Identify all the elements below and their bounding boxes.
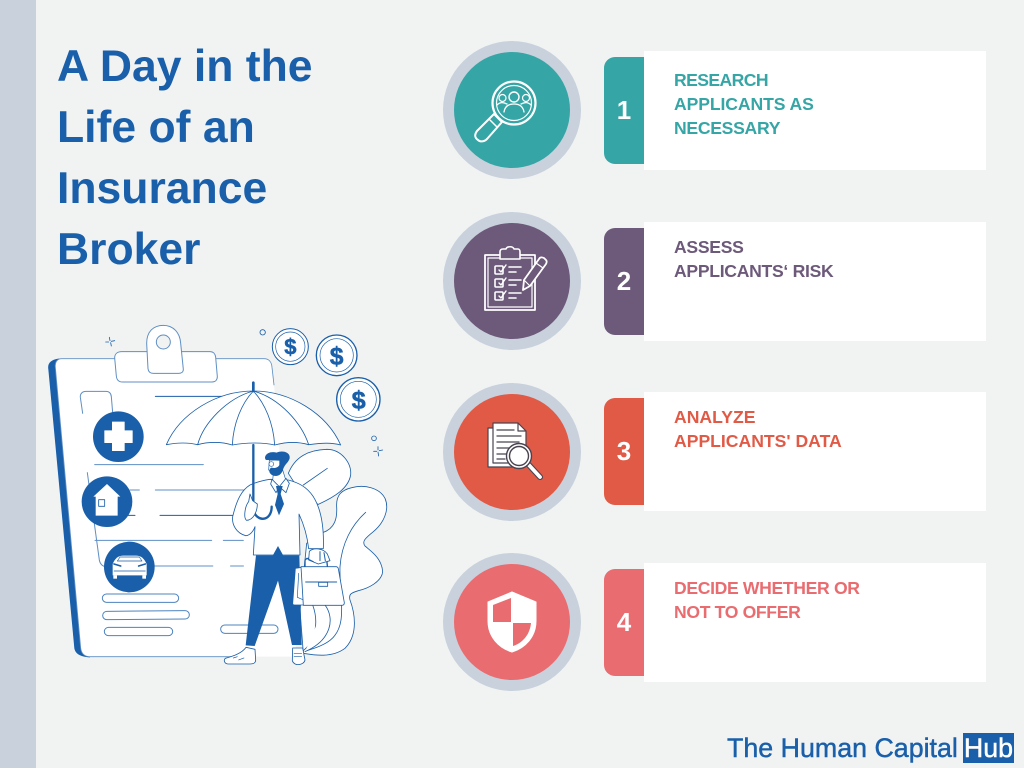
step 4 text: NOT TO OFFER xyxy=(674,602,800,622)
step 1 text xyxy=(674,70,814,138)
step 1: research applicants xyxy=(443,41,986,179)
step 2 circle with checklist icon xyxy=(443,212,581,350)
step 2 card xyxy=(644,222,986,341)
step 2 text xyxy=(674,237,834,281)
neck and face xyxy=(269,460,286,488)
step 1 card xyxy=(644,51,986,170)
form pill fields xyxy=(102,594,278,636)
briefcase xyxy=(293,549,344,605)
step 1 circle with magnifier icon xyxy=(443,41,581,179)
tie xyxy=(275,486,284,515)
clipboard sheet xyxy=(55,359,297,657)
left side band xyxy=(0,0,36,768)
trousers xyxy=(246,555,302,646)
step 1 text: RESEARCH xyxy=(674,70,768,90)
step 4 circle with shield icon xyxy=(443,553,581,691)
step 3 card xyxy=(644,392,986,511)
step 1 number tab xyxy=(604,57,644,164)
logo wordmark: The Human Capital xyxy=(727,733,958,763)
step 4 number tab xyxy=(604,569,644,676)
step 3 number tab: 3 xyxy=(617,436,631,466)
sparkles and dots xyxy=(106,330,383,456)
icon: car xyxy=(104,542,155,592)
glasses xyxy=(269,462,274,466)
step 4: decide whether to offer xyxy=(443,553,986,691)
step 2 text: ASSESS xyxy=(674,237,744,257)
coin 1: $ xyxy=(284,335,296,360)
form lines xyxy=(95,396,243,566)
collar xyxy=(271,478,289,493)
step 1 text: NECESSARY xyxy=(674,118,780,138)
umbrella canopy xyxy=(166,391,341,445)
step 1 number tab: 1 xyxy=(617,95,631,125)
shoes xyxy=(224,647,256,664)
hand xyxy=(245,494,257,520)
man with umbrella xyxy=(166,383,344,665)
coin 2: $ xyxy=(330,343,344,370)
logo: The Human Capital Hub xyxy=(727,733,1014,763)
icon: house xyxy=(82,476,132,527)
step 4 text: DECIDE WHETHER OR xyxy=(674,578,860,598)
clipboard xyxy=(48,325,297,657)
icon: medical cross xyxy=(93,411,144,462)
step 3 text: ANALYZE xyxy=(674,407,755,427)
jacket xyxy=(233,479,323,555)
document tab outline xyxy=(80,391,113,567)
title: A Day in the xyxy=(57,42,313,91)
title: Life of an xyxy=(57,103,255,152)
step 2 number tab xyxy=(604,228,644,335)
step 3 text: APPLICANTS' DATA xyxy=(674,431,842,451)
step 4 number tab: 4 xyxy=(617,607,631,637)
hair and beard xyxy=(265,451,290,476)
coin 3: $ xyxy=(352,386,366,414)
step 2 number tab: 2 xyxy=(617,266,631,296)
step 3 text xyxy=(674,407,842,451)
step 1 text: APPLICANTS AS xyxy=(674,94,814,114)
hand on handle xyxy=(309,549,330,564)
coins xyxy=(272,329,380,421)
logo badge: Hub xyxy=(964,733,1013,763)
plant leaves xyxy=(288,449,387,655)
clipboard back edge xyxy=(48,359,93,657)
step 4 card xyxy=(644,563,986,682)
title: Broker xyxy=(57,225,200,274)
step 4 text xyxy=(674,578,860,622)
title: Insurance xyxy=(57,164,267,213)
title xyxy=(57,42,313,274)
step 2: assess risk xyxy=(443,212,986,350)
clipboard clip xyxy=(115,352,217,382)
step 3 number tab xyxy=(604,398,644,505)
step 2 text: APPLICANTS‘ RISK xyxy=(674,261,833,281)
step 3: analyze data xyxy=(443,383,986,521)
umbrella pole and handle xyxy=(249,383,257,391)
step 3 circle with document magnifier icon xyxy=(443,383,581,521)
